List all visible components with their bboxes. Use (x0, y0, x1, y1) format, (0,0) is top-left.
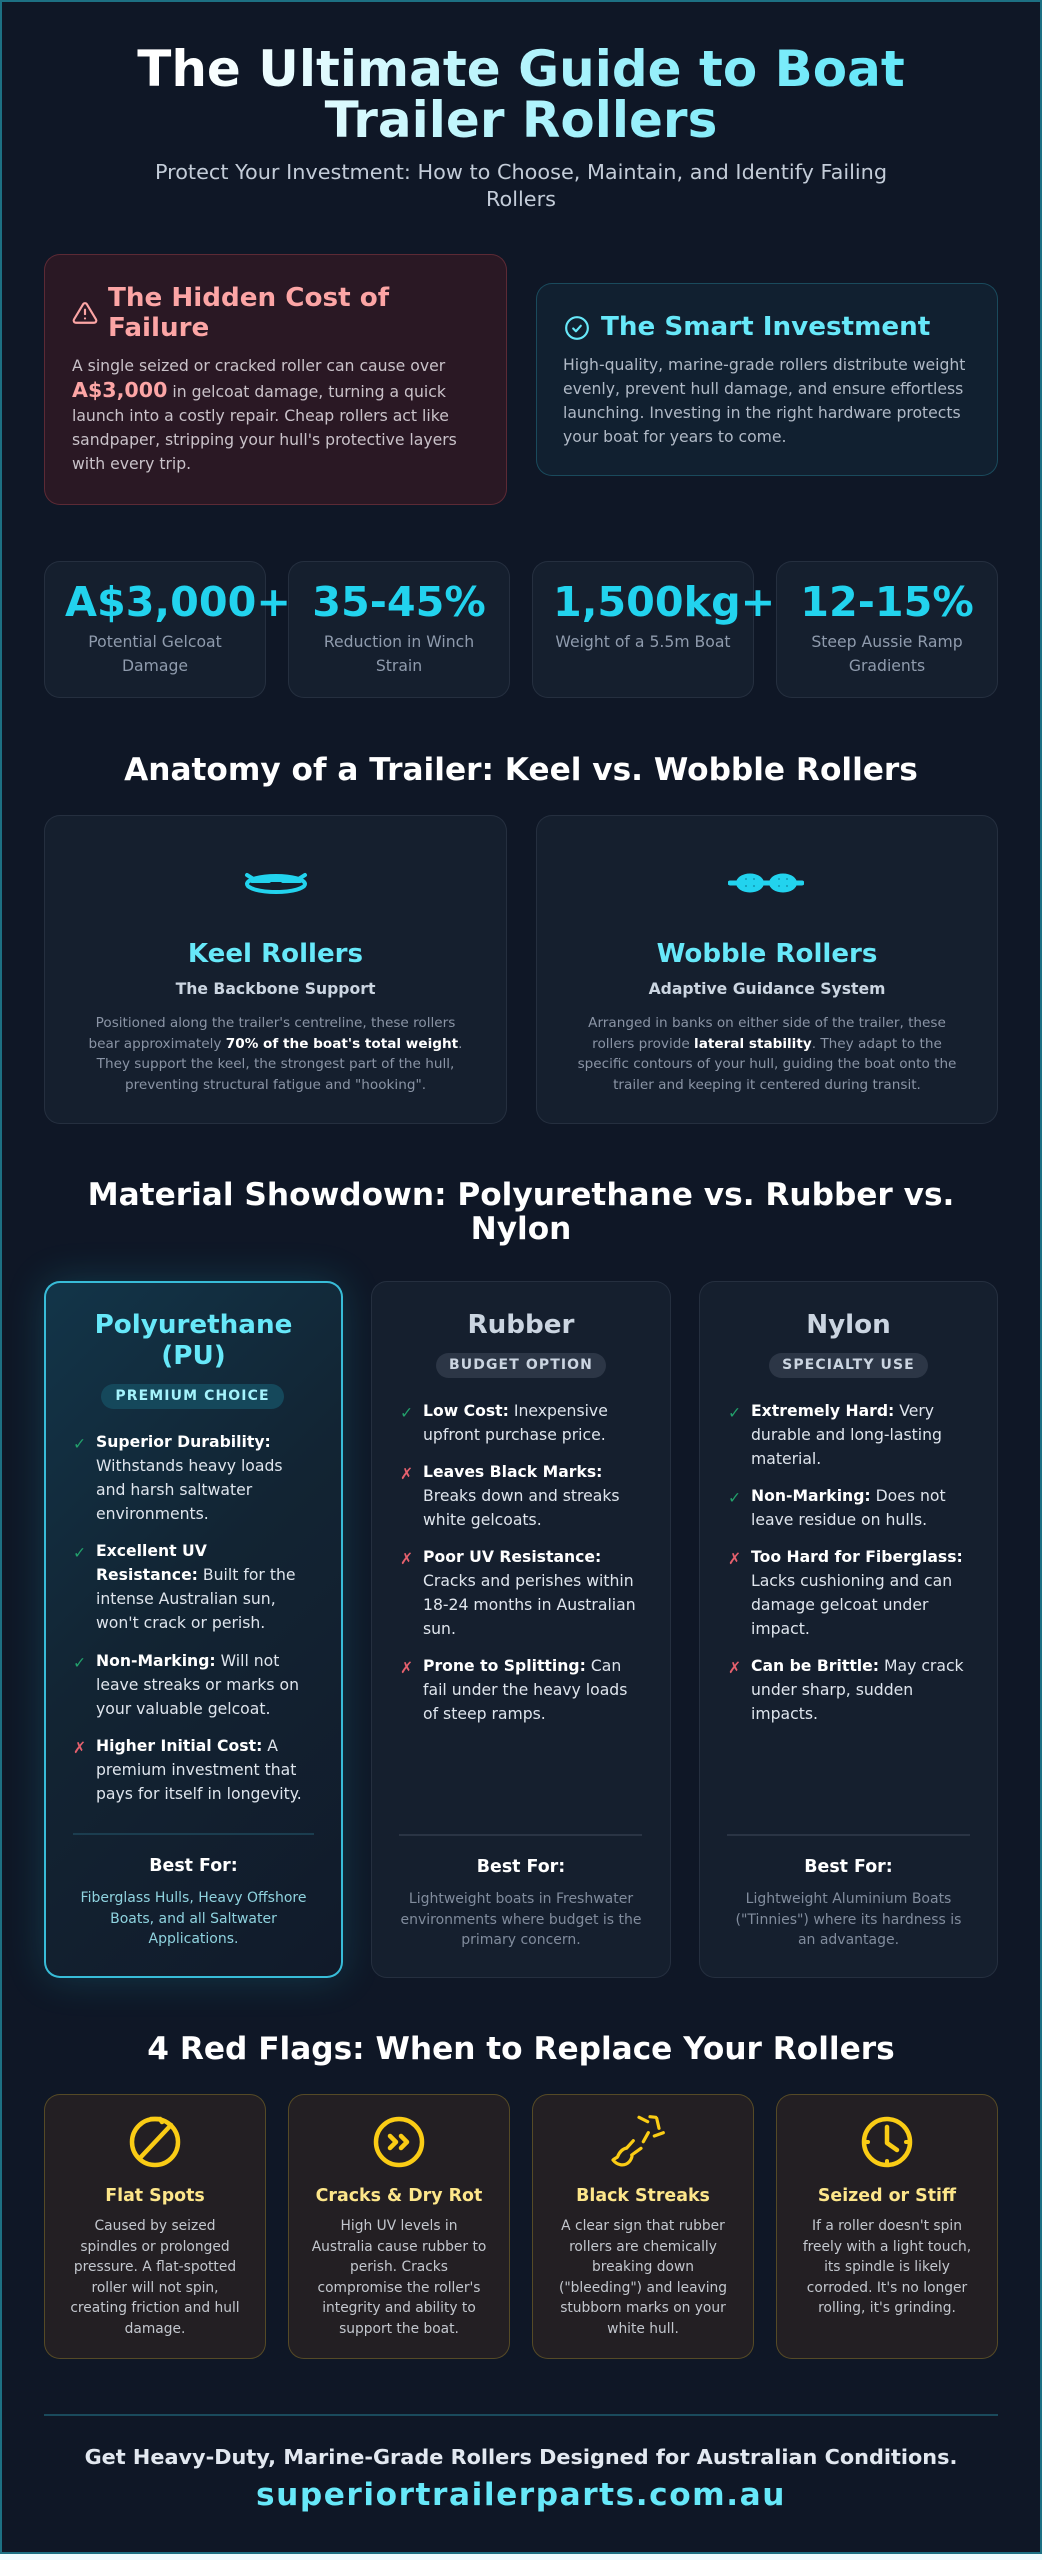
subheading: The Backbone Support (176, 979, 375, 998)
item: too hard: damage gelcoat under (751, 1595, 928, 1614)
panel: polyurethane (44, 1281, 343, 1978)
icon: clock (862, 2116, 912, 2168)
best for text (81, 1890, 306, 1947)
item: non-marking (751, 1486, 946, 1529)
description: rollers are chemically (569, 2238, 717, 2254)
icon: broken plug (611, 2115, 665, 2166)
heading: Black Streaks (576, 2186, 710, 2206)
label: Reduction in Winch (324, 632, 474, 651)
description: Positioned along the trailer's centreline, these rollers (96, 1015, 455, 1031)
body text: sandpaper, stripping your hull's protective layers (72, 430, 457, 449)
label: Weight of a 5.5m Boat (555, 632, 731, 651)
item: non-marking: Non-Marking: Will not (96, 1651, 279, 1670)
panel: rubber (371, 1281, 671, 1978)
cross: ✗ (400, 1658, 413, 1677)
best for label: Best For: (149, 1856, 238, 1876)
title (44, 44, 998, 146)
description: preventing structural fatigue and "hooking". (125, 1077, 426, 1093)
description (578, 1015, 956, 1093)
subtitle: Protect Your Investment: How to Choose, Maintain, and Identify Failing (155, 160, 887, 184)
icon: check circle (565, 316, 589, 340)
item: UV resistance (96, 1541, 296, 1632)
description: If a roller doesn't spin (812, 2218, 962, 2234)
body text: launching. Investing in the right hardware protects (563, 403, 961, 422)
badge: SPECIALTY USE (782, 1357, 915, 1373)
label (88, 632, 222, 675)
description: corroded. It's no longer (807, 2280, 967, 2296)
label (324, 632, 474, 675)
item: UV resistance: Resistance: Built for the (96, 1565, 296, 1584)
subtitle: Rollers (486, 187, 556, 211)
item: too hard: Too Hard for Fiberglass: (751, 1547, 963, 1566)
subheading: Adaptive Guidance System (649, 979, 885, 998)
label (811, 632, 963, 675)
label: Steep Aussie Ramp (811, 632, 963, 651)
item: black marks: Breaks down and streaks (423, 1486, 620, 1505)
call to action text: Get Heavy-Duty, Marine-Grade Rollers Designed for Australian Conditions. (85, 2445, 957, 2469)
heading: Wobble Rollers (657, 939, 877, 969)
description: specific contours of your hull, guiding the boat onto the (578, 1056, 956, 1072)
item: non-marking: your valuable gelcoat. (96, 1699, 270, 1718)
description: Arranged in banks on either side of the trailer, these (588, 1015, 946, 1031)
body text: evenly, prevent hull damage, and ensure effortless (563, 379, 963, 398)
icon: keel roller (244, 872, 308, 894)
body text: High-quality, marine-grade rollers distribute weight (563, 355, 965, 374)
cross: ✗ (728, 1549, 741, 1568)
item: UV resistance: sun. (423, 1619, 456, 1638)
number: A$3,000+ (65, 578, 291, 626)
panel: smart investment (536, 283, 998, 476)
description: Caused by seized (95, 2218, 215, 2234)
item: too hard: Lacks cushioning and can (751, 1571, 952, 1590)
best for text: an advantage. (798, 1932, 899, 1948)
title: Trailer Rollers (325, 91, 717, 149)
item: splitting: fail under the heavy loads (423, 1680, 627, 1699)
description: creating friction and hull (70, 2300, 240, 2316)
subtitle (155, 160, 887, 211)
best for text (736, 1891, 961, 1948)
description: ("bleeding") and leaving (559, 2280, 727, 2296)
item: UV resistance: intense Australian sun, (96, 1589, 276, 1608)
check: ✓ (73, 1653, 86, 1672)
heading: red flags: 4 Red Flags: When to Replace Your Rollers (147, 2031, 895, 2067)
description: compromise the roller's (317, 2280, 481, 2296)
panel: cracks and dry rot (288, 2094, 510, 2359)
description: its spindle is likely (824, 2259, 950, 2275)
description: stubborn marks on your (560, 2300, 726, 2316)
badge (436, 1353, 606, 1378)
description (559, 2218, 727, 2336)
item: UV resistance: Poor UV Resistance: (423, 1547, 601, 1566)
item: splitting: of steep ramps. (423, 1704, 546, 1723)
number: 12-15% (800, 578, 974, 626)
number: 1,500kg+ (553, 578, 775, 626)
heading: The Hidden Cost of (108, 283, 389, 313)
number: 35-45% (312, 578, 486, 626)
panel: flat spots (44, 2094, 266, 2359)
description: breaking down (592, 2259, 694, 2275)
label: Potential Gelcoat (88, 632, 222, 651)
item: too hard (751, 1547, 963, 1638)
material title: Nylon (806, 1310, 891, 1340)
item: black marks: Leaves Black Marks: (423, 1462, 602, 1481)
item: UV resistance: 18-24 months in Australian (423, 1595, 636, 1614)
check: ✓ (73, 1434, 86, 1453)
description: freely with a light touch, (803, 2238, 971, 2254)
heading: Cracks & Dry Rot (316, 2186, 482, 2206)
best for text: primary concern. (461, 1932, 581, 1948)
best for label: Best For: (477, 1857, 565, 1877)
item: splitting: Prone to Splitting: Can (423, 1656, 621, 1675)
best for text: ("Tinnies") where its hardness is (736, 1912, 961, 1928)
description: white hull. (607, 2320, 679, 2336)
item: brittle: under sharp, sudden (751, 1680, 913, 1699)
description: bear approximately 70% of the boat's total weight. (89, 1036, 462, 1052)
best for text: environments where budget is the (400, 1912, 642, 1928)
item: durability (96, 1432, 283, 1523)
heading: Seized or Stiff (818, 2186, 956, 2206)
best for text: Boats, and all Saltwater (110, 1910, 277, 1926)
icon: warning triangle (72, 302, 98, 324)
item: durability: environments. (96, 1504, 209, 1523)
item: non-marking: Non-Marking: Does not (751, 1486, 946, 1505)
icon: flat spot roller (130, 2116, 180, 2168)
pros and cons list (728, 1401, 964, 1723)
stat: winch strain (288, 561, 510, 698)
description: trailer and keeping it centered during transit. (613, 1077, 921, 1093)
stat: ramp gradients (776, 561, 998, 698)
description: support the boat. (339, 2320, 459, 2336)
check: ✓ (728, 1403, 741, 1422)
item: low cost: Low Cost: Inexpensive (423, 1401, 608, 1420)
item: UV resistance: won't crack or perish. (96, 1613, 265, 1632)
panel: black streaks (532, 2094, 754, 2359)
body text: your boat for years to come. (563, 427, 786, 446)
body text: A single seized or cracked roller can cause over (72, 356, 445, 375)
material title: (PU) (161, 1341, 226, 1371)
heading: The Smart Investment (601, 312, 930, 342)
description (776, 2216, 998, 2318)
best for text (400, 1891, 642, 1948)
heading (108, 283, 390, 343)
best for label: Best For: (804, 1857, 893, 1877)
description: rollers provide lateral stability. They adapt to the (592, 1036, 942, 1052)
item: durability: Superior Durability: (96, 1432, 271, 1451)
title: The Ultimate Guide to Boat (137, 40, 905, 98)
cross: ✗ (400, 1464, 413, 1483)
material title: Polyurethane (95, 1310, 292, 1340)
badge (769, 1353, 928, 1378)
icon: cracked roller (374, 2116, 424, 2168)
pros and cons list (73, 1432, 302, 1803)
material title: Rubber (468, 1310, 574, 1340)
material title (95, 1310, 292, 1371)
icon: wobble roller (728, 874, 804, 892)
badge: BUDGET OPTION (449, 1357, 593, 1373)
pros and cons list (400, 1401, 636, 1723)
item: UV resistance (423, 1547, 636, 1638)
item: initial cost (96, 1736, 302, 1803)
item: too hard: impact. (751, 1619, 810, 1638)
body text: launch into a costly repair. Cheap rollers act like (72, 406, 449, 425)
item: splitting (423, 1656, 627, 1723)
description: rolling, it's grinding. (818, 2300, 956, 2316)
best for text: Fiberglass Hulls, Heavy Offshore (81, 1890, 306, 1906)
heading: anatomy: Anatomy of a Trailer: Keel vs. Wobble Rollers (124, 752, 918, 788)
label: Damage (122, 656, 188, 675)
panel: nylon (699, 1281, 998, 1978)
check: ✓ (728, 1488, 741, 1507)
heading: material showdown: Nylon (471, 1211, 571, 1247)
item: initial cost: premium investment that (96, 1760, 296, 1779)
description (312, 2218, 486, 2336)
item: hard: durable and long-lasting (751, 1425, 942, 1444)
check: ✓ (400, 1403, 413, 1422)
item: brittle: impacts. (751, 1704, 818, 1723)
description: Australia cause rubber to (312, 2238, 486, 2254)
description: High UV levels in (340, 2218, 457, 2234)
best for text: Lightweight Aluminium Boats (746, 1891, 951, 1907)
website url: superiortrailerparts.com.au (256, 2477, 786, 2513)
description: A clear sign that rubber (561, 2218, 725, 2234)
best for text: Applications. (149, 1931, 238, 1947)
heading: Failure (108, 313, 209, 343)
panel: hidden cost of failure (44, 254, 507, 505)
panel: keel rollers (44, 815, 507, 1124)
description: integrity and ability to (322, 2300, 476, 2316)
item: black marks (423, 1462, 620, 1529)
body text: A$3,000 in gelcoat damage, turning a quick (72, 378, 446, 402)
item: non-marking: leave residue on hulls. (751, 1510, 927, 1529)
badge: PREMIUM CHOICE (115, 1388, 270, 1404)
item: low cost: upfront purchase price. (423, 1425, 606, 1444)
panel: seized or stiff (776, 2094, 998, 2359)
item: low cost (423, 1401, 608, 1444)
description (70, 2218, 240, 2336)
panel: wobble rollers (536, 815, 998, 1124)
item: brittle (751, 1656, 964, 1723)
heading: material showdown (88, 1177, 954, 1247)
item: initial cost: pays for itself in longevity. (96, 1784, 302, 1803)
cross: ✗ (400, 1549, 413, 1568)
heading: Flat Spots (105, 2186, 205, 2206)
item: non-marking (96, 1651, 299, 1718)
best for text: Lightweight boats in Freshwater (409, 1891, 633, 1907)
stat: gelcoat damage (44, 561, 266, 698)
description: spindles or prolonged (80, 2238, 230, 2254)
item: UV resistance: Cracks and perishes within (423, 1571, 634, 1590)
label: Strain (376, 656, 422, 675)
label: Gradients (849, 656, 925, 675)
cross: ✗ (728, 1658, 741, 1677)
body text (563, 355, 965, 446)
description: perish. Cracks (350, 2259, 448, 2275)
item: hard: Extremely Hard: Very (751, 1401, 934, 1420)
description: damage. (125, 2320, 185, 2336)
item: black marks: white gelcoats. (423, 1510, 542, 1529)
item: brittle: Can be Brittle: May crack (751, 1656, 964, 1675)
heading: Keel Rollers (188, 939, 363, 969)
body text (72, 356, 457, 473)
item: durability: Withstands heavy loads (96, 1456, 283, 1475)
item: non-marking: leave streaks or marks on (96, 1675, 299, 1694)
item: initial cost: Higher Initial Cost: A (96, 1736, 278, 1755)
item: hard (751, 1401, 942, 1468)
heading: material showdown: Material Showdown: Polyurethane vs. Rubber vs. (88, 1177, 954, 1213)
stat: boat weight (532, 561, 754, 698)
item: UV resistance: Excellent UV (96, 1541, 207, 1560)
cross: ✗ (73, 1738, 86, 1757)
body text: with every trip. (72, 454, 191, 473)
item: durability: and harsh saltwater (96, 1480, 252, 1499)
description (89, 1015, 462, 1093)
check: ✓ (73, 1543, 86, 1562)
description: pressure. A flat-spotted (74, 2259, 236, 2275)
description: They support the keel, the strongest part of the hull, (97, 1056, 454, 1072)
item: hard: material. (751, 1449, 821, 1468)
description: roller will not spin, (91, 2280, 219, 2296)
badge (101, 1384, 284, 1409)
